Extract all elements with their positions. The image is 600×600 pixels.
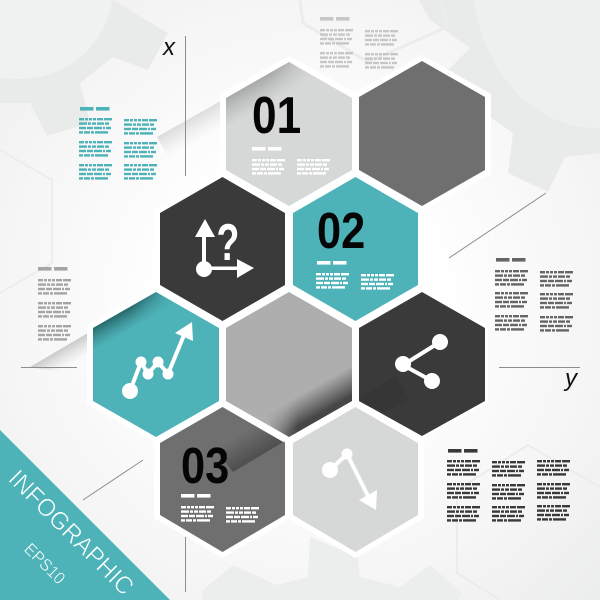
- paper fold shadows: [30, 98, 240, 372]
- axis label x: x: [162, 34, 176, 61]
- hexagon: centre grey: [226, 292, 352, 437]
- icon: axes with question mark: ?: [217, 213, 239, 271]
- text block 02: [316, 261, 394, 290]
- text block 03: [181, 494, 259, 523]
- banner subtitle: EPS10: [20, 539, 69, 588]
- text group: top faded: [320, 17, 398, 69]
- hexagon: grey 03: [154, 401, 291, 558]
- hexagon: dark question: [154, 171, 291, 327]
- hexagon: light grey with down arrow: [287, 401, 424, 558]
- icon: share: [395, 334, 448, 389]
- axis label y: y: [563, 365, 579, 392]
- text block 01: [252, 147, 330, 175]
- hexagon: dark grey top right: [353, 55, 491, 212]
- text group: left grey: [38, 267, 71, 341]
- hexagon: dark share: [359, 292, 485, 436]
- icon: falling arrow: [322, 448, 377, 510]
- number 03: 03: [181, 438, 229, 495]
- icon: axes with question mark: [195, 213, 254, 278]
- hexagon: teal chart: [87, 292, 219, 437]
- number 02: 02: [317, 203, 365, 260]
- number 01: 01: [252, 87, 301, 145]
- hexagon: grey 01: [220, 62, 352, 206]
- text group: teal: [79, 107, 157, 180]
- corner banner: [0, 430, 170, 600]
- text group: right grey: [495, 258, 573, 332]
- hexagon: teal 02: [287, 171, 424, 327]
- icon: rising chart arrow: [122, 322, 193, 399]
- text group: bottom right dark: [447, 449, 570, 522]
